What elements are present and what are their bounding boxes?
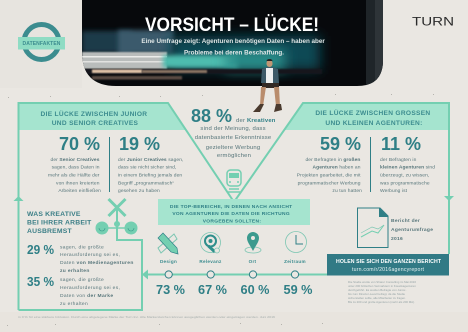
panel: top-bereiche heading: VON AGENTUREN DIE DATEN DIE RICHTUNG — [172, 211, 290, 217]
logo: Datenfakten roundel — [18, 24, 65, 60]
heading: left: UND SENIOR CREATIVES — [52, 120, 139, 127]
text: methodology: sicherstellen sollte, alle Mitarbeiter zu fragen. — [348, 296, 406, 300]
panel: call to action — [327, 254, 449, 276]
heading: was kreative ausbremst: BEI IHRER ARBEIT — [27, 220, 92, 226]
timeline markers — [165, 271, 299, 278]
stat: 70 % — [48, 134, 101, 194]
percentages — [156, 283, 312, 297]
stat: 59 %: zu tun hatten — [332, 188, 362, 194]
subtitle: Probleme bei deren Beschaffung. — [184, 50, 284, 56]
stat: 59 %: 59 % — [320, 134, 361, 154]
stat: 29 %: 29 % — [27, 242, 54, 257]
panel: call to action: turn.com/r/2016agencyreport — [352, 267, 425, 273]
stat: 59 %: Projekten gearbeitet, die mit — [297, 172, 361, 178]
stat: 88 %: ermöglichen — [217, 153, 251, 159]
text: methodology: Die Studie wurde von Sharer Consulting im Mai 2016 — [348, 280, 416, 284]
stat: 35 % — [27, 274, 122, 307]
stat: 11 %: 11 % — [381, 134, 421, 154]
panel header fill: left — [18, 103, 186, 130]
percentages: 73 % — [156, 283, 185, 297]
panel: top-bereiche heading: DIE TOP-BEREICHE, IN DENEN NACH ANSICHT — [170, 204, 292, 210]
icon: ort location pin — [245, 232, 261, 253]
heading: right: DIE LÜCKE ZWISCHEN GROSSEN — [315, 108, 430, 117]
divider — [109, 137, 110, 192]
stat: 88 % — [191, 106, 276, 159]
heading: left: DIE LÜCKE ZWISCHEN JUNIOR — [41, 109, 147, 118]
stat: 19 %: der Junior Creatives sagen, — [118, 158, 184, 163]
stat: 11 %: was programmatische — [380, 180, 430, 186]
stat: 70 %: der Senior Creatives — [50, 158, 100, 163]
stat: 29 %: Herausforderung sei es, — [60, 252, 120, 258]
arrowhead: right line down — [444, 196, 454, 201]
stat: 35 %: 35 % — [27, 274, 54, 289]
heading: right: UND KLEINEN AGENTUREN: — [325, 120, 423, 127]
photo: dark train window — [82, 0, 383, 86]
icon: design pencil and ruler — [158, 233, 178, 254]
icon: report document — [358, 208, 388, 248]
heading: was kreative ausbremst: WAS KREATIVE — [27, 211, 81, 218]
text: bericht: 2016 — [391, 236, 403, 242]
stat: 11 %: Werbung ist — [380, 188, 408, 194]
text: methodology: durchgeführt. Es wurden Befragte von Junior- — [348, 288, 406, 292]
stat: 35 %: Daten von der Marke — [60, 294, 113, 299]
arrowhead: left line up — [14, 196, 24, 201]
arrowhead: timeline to left — [142, 270, 148, 280]
stat: 88 %: gezieltere Werbung — [206, 145, 260, 151]
stat: 19 %: Begriff „programmatisch“ — [118, 180, 174, 186]
stat: 29 %: sagen, die größte — [60, 244, 104, 250]
panel: call to action: HOLEN SIE SICH DEN GANZEN BERICHT — [336, 259, 442, 265]
subtitle: Eine Umfrage zeigt: Agenturen benötigen Daten – haben aber — [141, 38, 325, 45]
text: bericht: Agenturumfrage — [391, 227, 433, 233]
percentages: 67 % — [198, 283, 227, 297]
icon: relevanz target — [200, 232, 220, 253]
heading: was kreative ausbremst: AUSBREMST — [27, 228, 72, 235]
stat: 88 %: 88 % — [191, 106, 232, 126]
stat: 19 % — [118, 134, 185, 194]
icon: train — [227, 170, 241, 192]
icon: zeitraum clock — [286, 232, 306, 252]
stat: 70 %: mehr als die Hälfte der — [48, 172, 100, 178]
label: Zeitraum: Zeitraum — [284, 259, 306, 264]
stat: 59 % — [297, 134, 362, 194]
stat: 59 %: programmatischer Werbung — [298, 180, 361, 186]
stat: 29 %: zu erhalten — [60, 268, 90, 274]
panel: top-bereiche heading: VORGEBEN SOLLTEN: — [203, 218, 261, 224]
stat: 88 %: datenbasierte Erkenntnisse — [195, 135, 272, 141]
stat: 35 %: sagen, die größte — [60, 277, 104, 283]
network lines — [18, 103, 449, 310]
stat: 19 %: 19 % — [119, 134, 160, 154]
stat: 11 %: der Befragten in — [380, 157, 417, 163]
panel: top-bereiche heading — [158, 199, 310, 225]
text: footnote: in 0 % für eine stärkere Inklusion. Durch eine abgelegene Marke der Turn Inc. Alle Markenzeichen können ausgeglichen werden oder eingetragen werden. Juni 2016 — [18, 315, 275, 319]
label: Ort: Ort — [249, 259, 257, 264]
stat: 29 %: Daten von Medienagenturen — [60, 261, 134, 266]
stat: 70 %: 70 % — [59, 134, 100, 154]
stat: 59 %: der Befragten in großen — [305, 158, 361, 163]
title: VORSICHT – LÜCKE! — [145, 15, 319, 36]
label: Relevanz: Relevanz — [199, 259, 222, 264]
stat: 11 %: überzeugt, zu wissen, — [380, 172, 429, 178]
icon: cross and thumbs on line — [96, 199, 138, 234]
text: methodology: unter 200 britischen Vermarktern in Kreativagenturen — [348, 284, 416, 288]
stat: 59 %: Agenturen haben an — [312, 166, 361, 171]
panel header fill: right — [284, 103, 449, 130]
percentages: 60 % — [240, 283, 270, 297]
stat: 11 % — [380, 134, 436, 194]
logo: Turn: TURN — [412, 16, 454, 28]
stat: 19 %: gesehen zu haben — [118, 188, 160, 194]
stat: 70 %: von ihnen kreierten — [56, 180, 100, 186]
text: bericht: Bericht der — [391, 218, 420, 224]
stat: 88 %: sind der Meinung, dass — [200, 126, 266, 132]
divider — [370, 137, 371, 192]
stat: 35 %: Herausforderung sei es, — [60, 285, 120, 291]
icon: person sitting on ledge — [253, 59, 282, 112]
stat: 35 %: zu erhalten — [60, 301, 88, 307]
stat: 70 %: Arbeiten einfließen — [58, 188, 101, 194]
text: methodology: Bis zu 200 und große Agenturen (mehr als 200 MA). — [348, 300, 415, 304]
text: methodology: bis zum Director-Level befragt, da die Studie — [348, 292, 405, 296]
label: Design: Design — [160, 259, 177, 264]
stat: 11 %: kleinen Agenturen sind — [380, 166, 435, 171]
stat: 88 %: der Kreativen — [236, 118, 276, 124]
stat: 29 % — [27, 242, 135, 274]
stat: 19 %: in einem Briefing jemals den — [118, 172, 182, 178]
stat: 19 %: dass sie nicht sicher sind, — [118, 165, 176, 171]
logo: Datenfakten roundel: DATENFAKTEN — [23, 41, 61, 47]
percentages: 59 % — [284, 283, 312, 297]
stat: 70 %: sagen, dass Daten in — [52, 165, 100, 171]
